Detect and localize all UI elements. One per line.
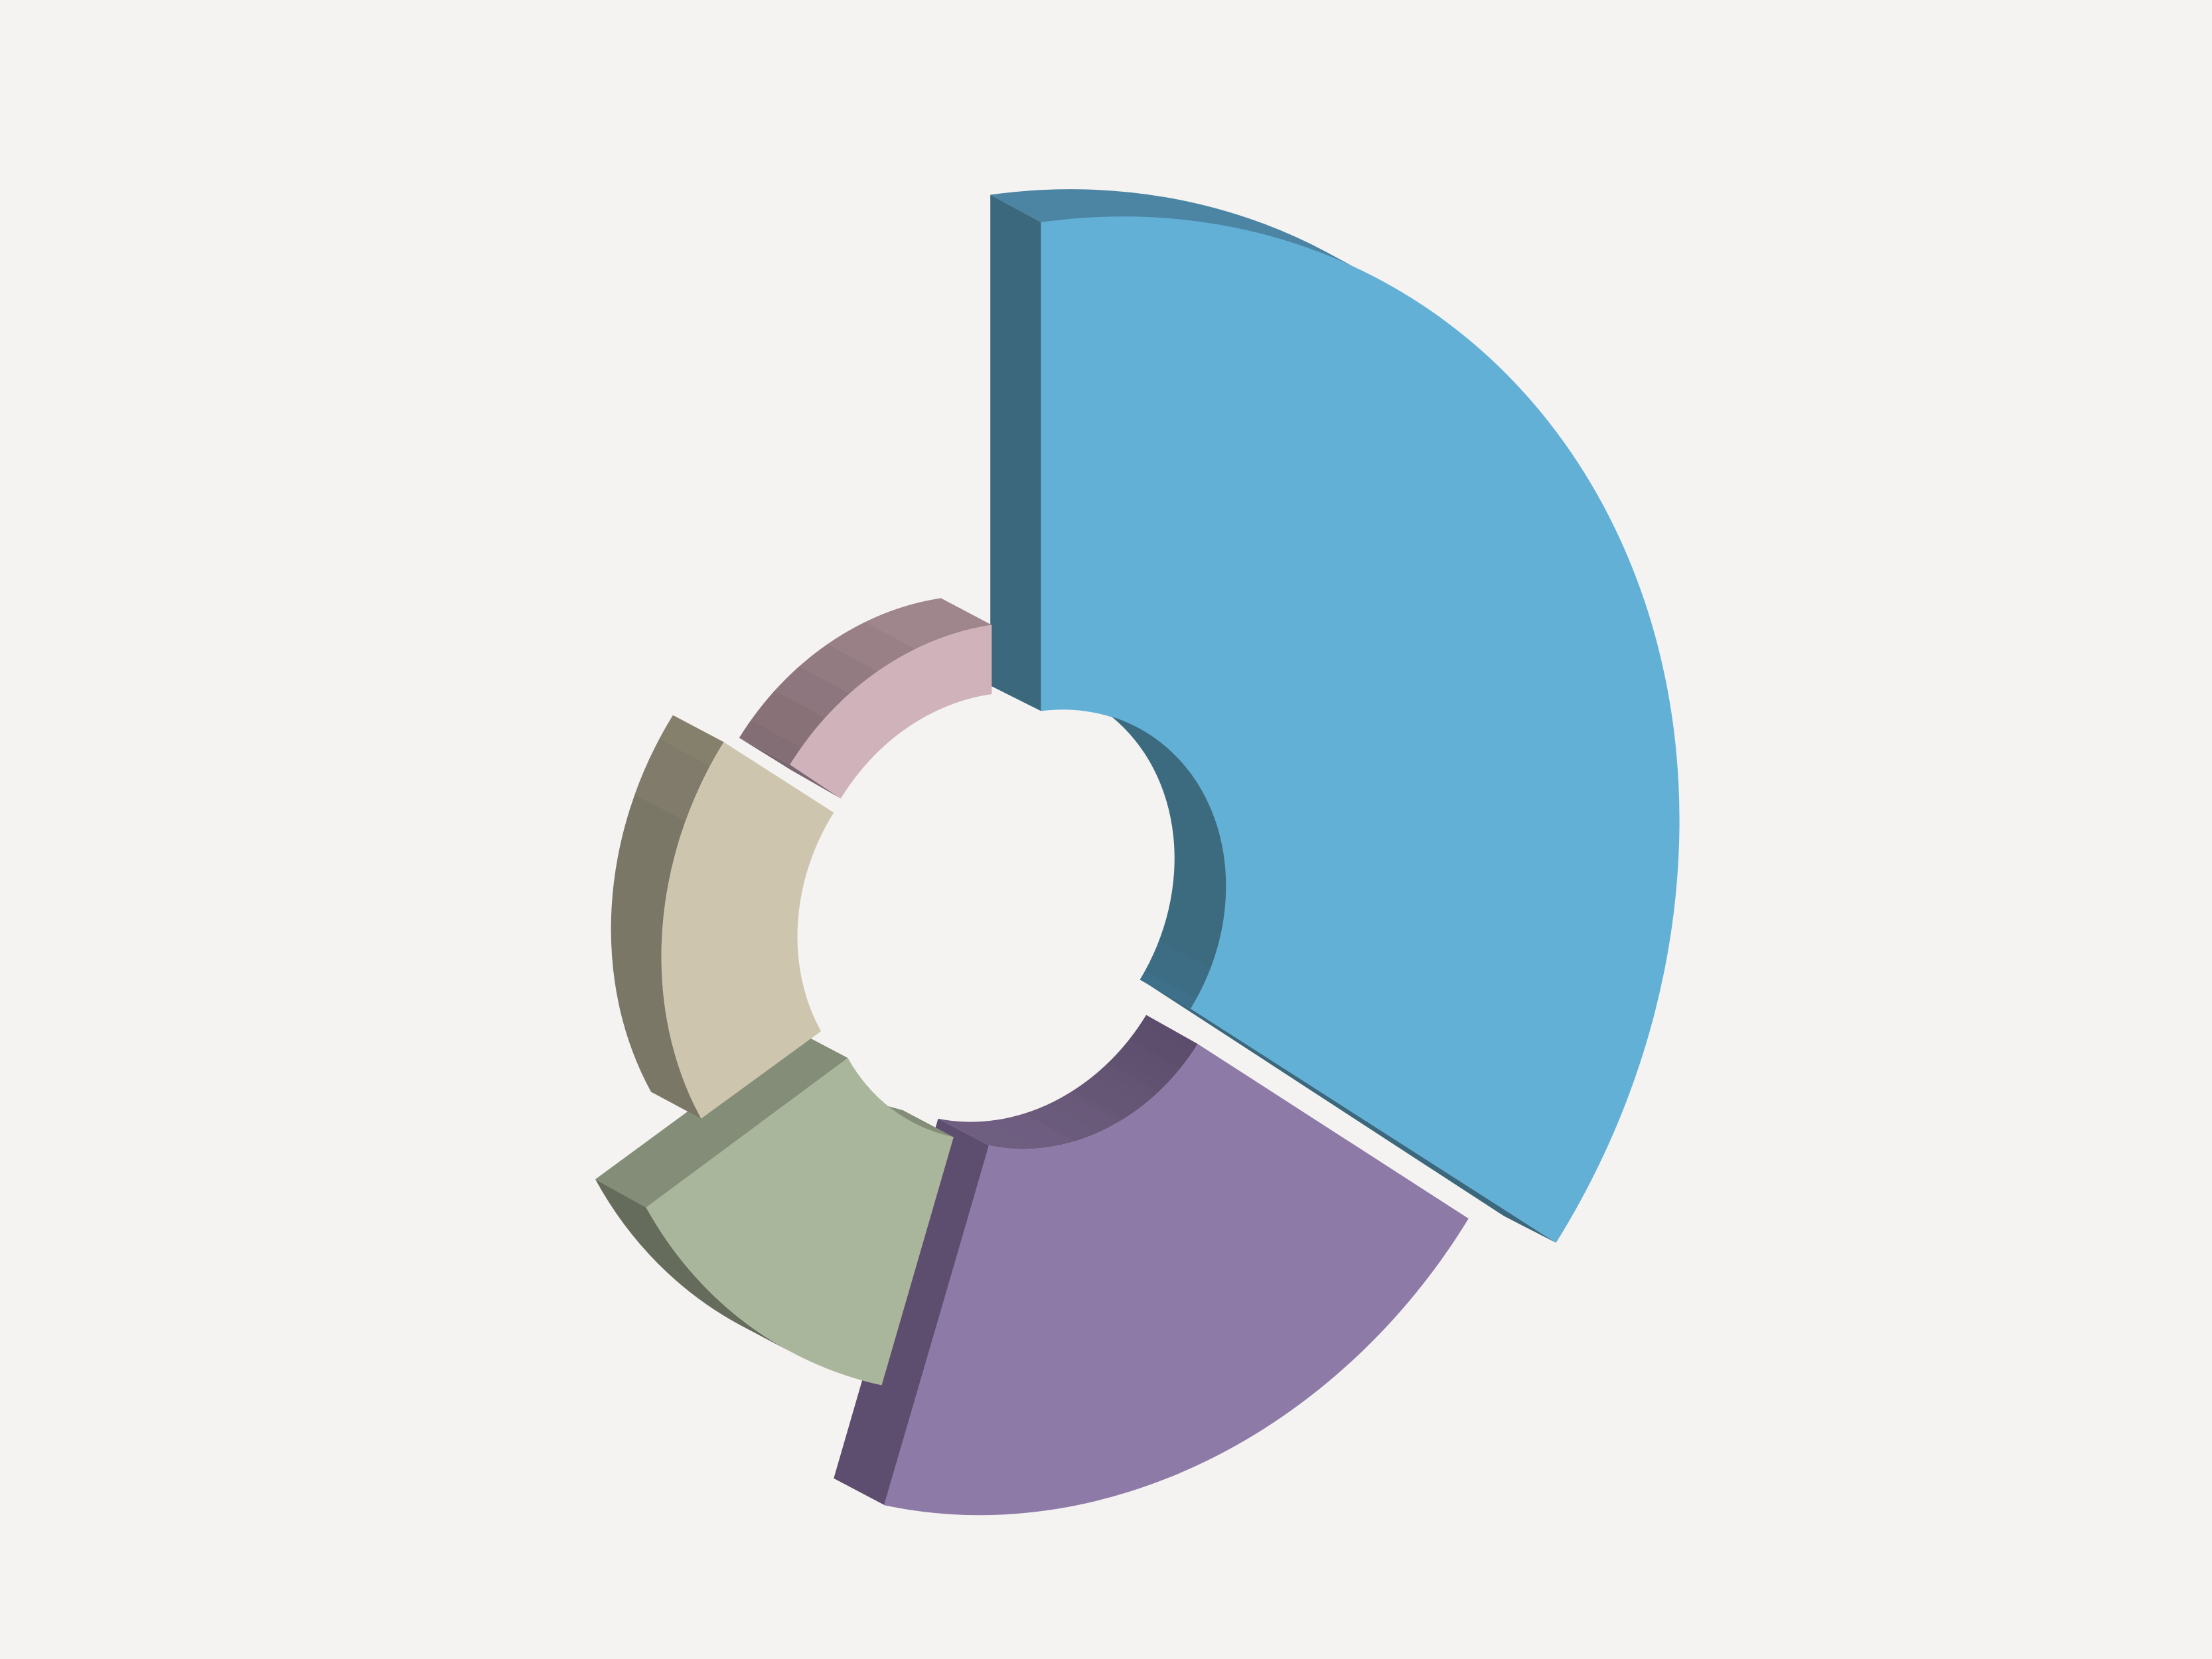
slice: green <box>595 1031 954 1386</box>
beige face <box>662 742 834 1119</box>
slice: pink <box>739 598 992 798</box>
blue lower edge strip <box>1140 979 1556 1243</box>
slice: purple <box>834 1015 1469 1515</box>
pink lower sliver <box>739 738 841 798</box>
slice: beige <box>611 715 834 1119</box>
purple side wall <box>834 1119 989 1505</box>
purple inner wall <box>938 1015 1198 1149</box>
green face <box>646 1058 954 1386</box>
blue inner wall <box>1112 717 1226 1009</box>
blue top rim <box>990 189 1377 279</box>
pink outer wall <box>739 598 992 764</box>
slice: blue (largest) <box>990 189 1680 1243</box>
blue side wall <box>990 194 1041 711</box>
blue face <box>1041 216 1680 1243</box>
purple face <box>884 1044 1469 1515</box>
3D exploded donut chart <box>595 189 1680 1516</box>
beige outer wall <box>611 715 723 1119</box>
green outer wall <box>595 1179 791 1352</box>
green top wall <box>595 1031 848 1208</box>
green inner sliver <box>887 1106 954 1137</box>
pink face <box>790 625 992 798</box>
